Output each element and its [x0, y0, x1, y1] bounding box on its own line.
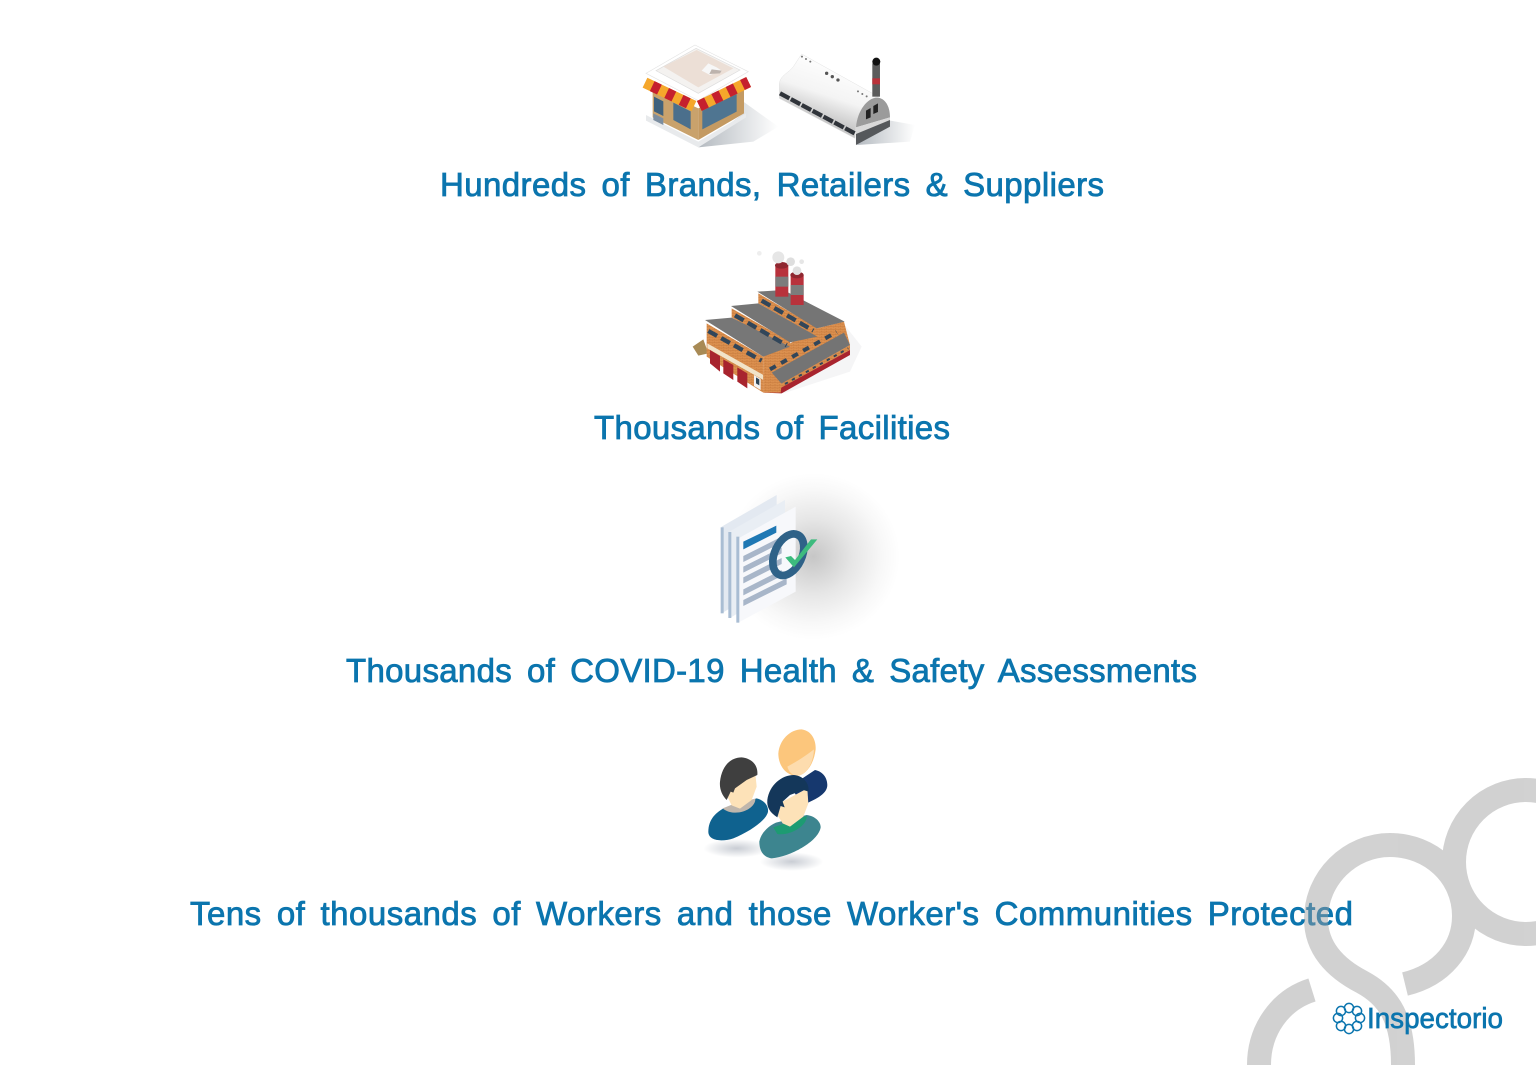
icon: brick factory [693, 251, 862, 393]
heading: facilities: Thousands of Facilities [594, 409, 950, 446]
logo wordmark: Inspectorio [1367, 1003, 1503, 1035]
icon: group of workers [703, 729, 827, 871]
icon: white warehouse with chimney [779, 54, 915, 145]
heading: workers and communities: Tens of thousands of Workers and those Worker's Communities Protected [190, 895, 1353, 932]
logo mark: ring of circles [1333, 1003, 1365, 1034]
heading: brands, retailers and suppliers: Hundreds of Brands, Retailers & Suppliers [440, 166, 1104, 203]
decorative grey rings [1259, 790, 1536, 1065]
icon: retail shop [645, 45, 778, 147]
icon: assessment document with check [721, 473, 900, 640]
heading: COVID-19 assessments: Thousands of COVID-19 Health & Safety Assessments [346, 652, 1197, 689]
logo: Inspectorio [1333, 1003, 1503, 1035]
